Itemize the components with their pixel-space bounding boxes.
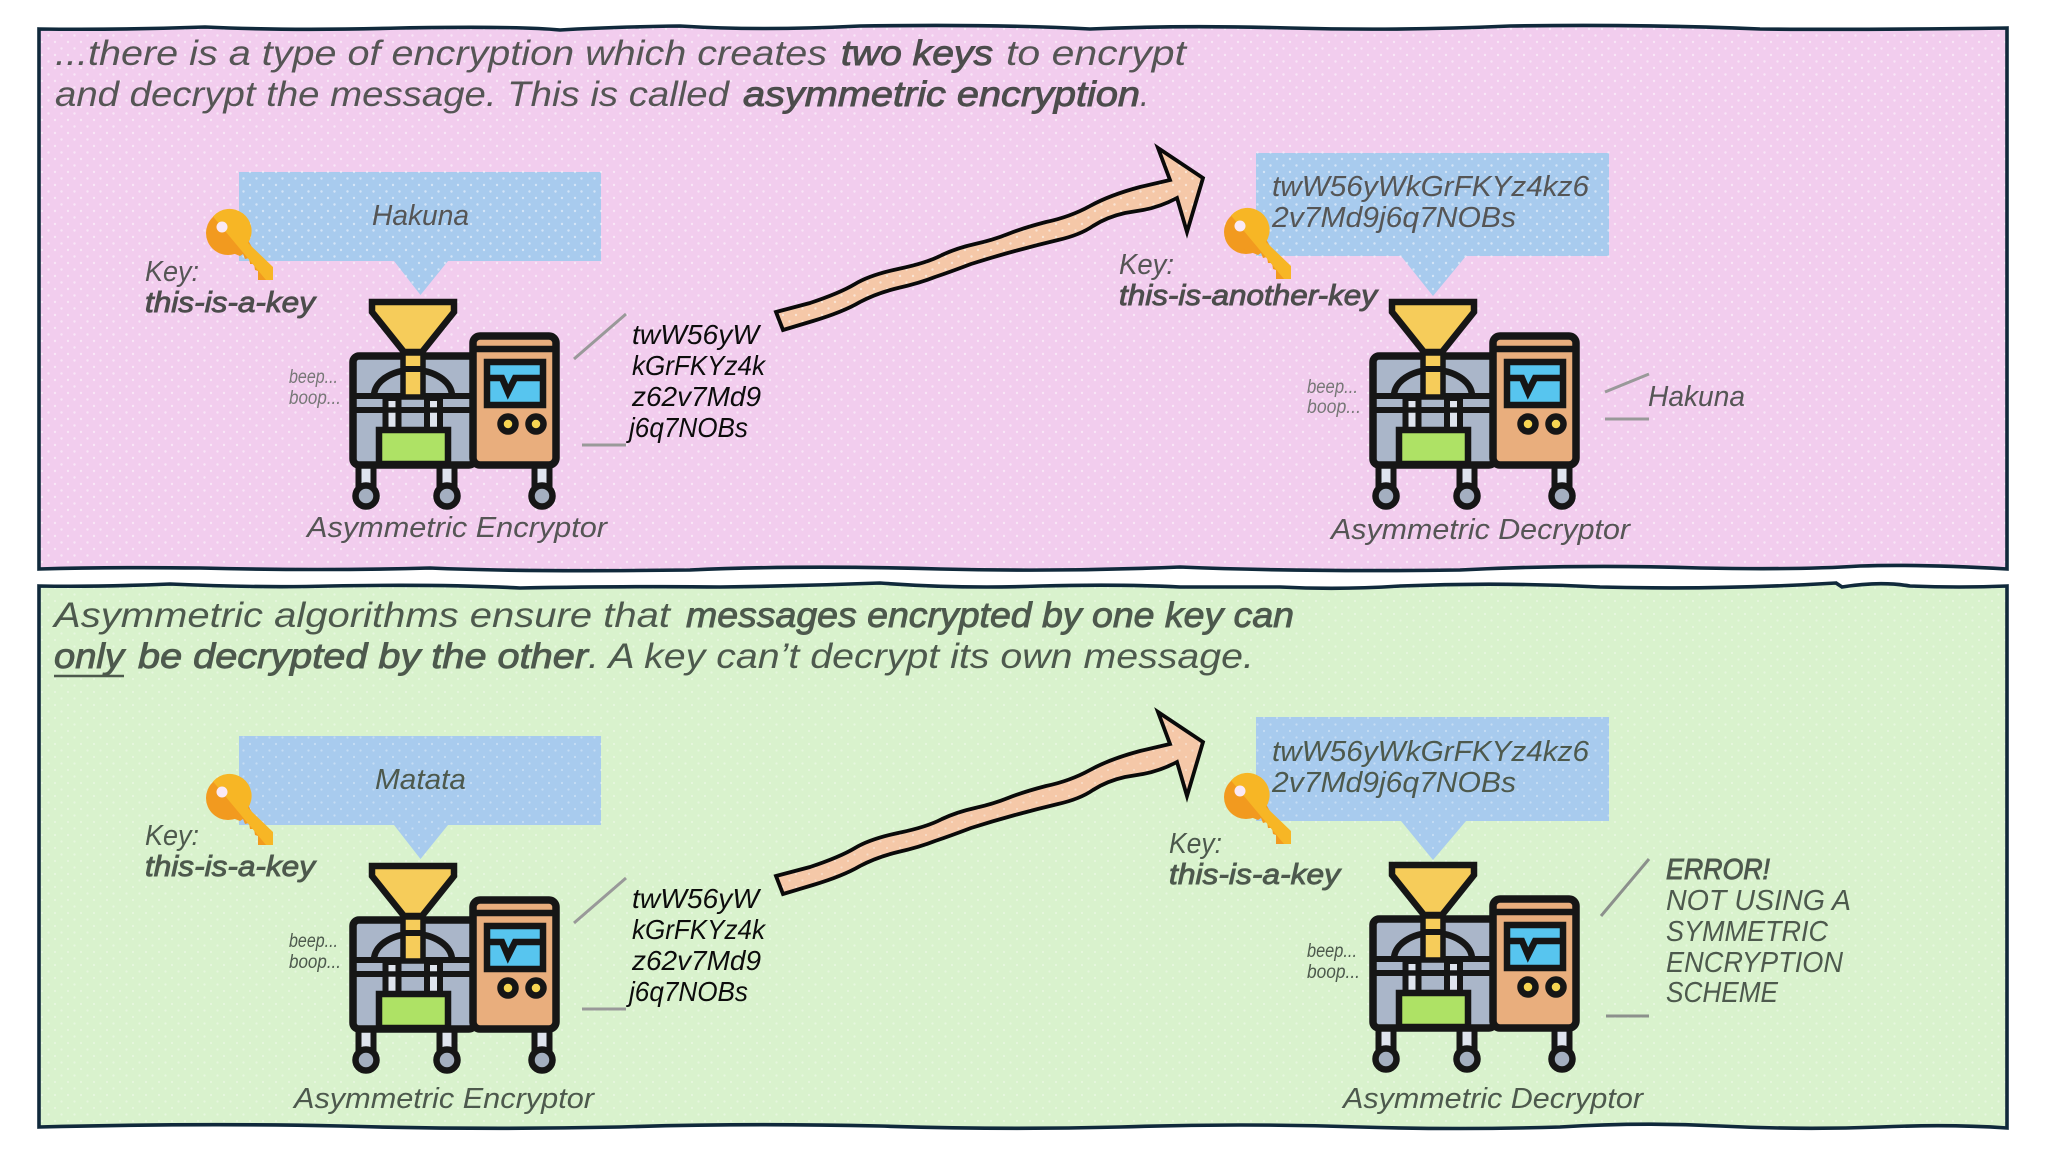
icon: encryptor machine [353,302,556,506]
icon: decryptor machine [1373,865,1576,1070]
key label: this-is-a-key [1169,859,1342,891]
beep boop label: beep... [1307,377,1358,398]
ciphertext output: z62v7Md9 [631,381,761,412]
key label: another key: Key: [1119,249,1174,281]
arrow: encryptor to decryptor [776,148,1203,330]
speech bubble: ciphertext input [1256,717,1609,860]
ciphertext output: twW56yW [632,319,762,350]
beep boop label: boop... [1307,962,1360,983]
icon: decryptor machine [1373,302,1576,506]
beep boop label: boop... [1307,397,1361,418]
beep boop label [1307,941,1360,983]
output lines [574,314,626,445]
text: input message: Hakuna [372,200,469,232]
error message: ERROR! [1666,854,1770,886]
key label [1169,828,1342,891]
machine label: decryptor: Asymmetric Decryptor [1329,514,1631,546]
error message: NOT USING A [1666,885,1851,917]
beep boop label [289,931,341,973]
heading: two keys: to encrypt [1006,34,1187,73]
key label: this-is-a-key [145,287,317,319]
icon: key (decryptor) [1224,773,1291,844]
beep boop label [1307,377,1361,418]
icon: key (encryptor) [206,774,273,845]
beep boop label [289,367,341,409]
heading: two keys: ...there is a type of encryption which creates [55,34,827,73]
key label: Key: [145,256,199,288]
icon: encryptor machine [353,866,556,1070]
arrow: encryptor to decryptor [776,712,1203,894]
text: ciphertext in bubble: 2v7Md9j6q7NOBs [1271,202,1516,234]
panel: same key cannot decrypt (green) [39,583,2007,1128]
ciphertext output: kGrFKYz4k [632,350,767,381]
icon: key (encryptor) [206,209,273,280]
key label: Key: [145,820,199,852]
ciphertext output [625,883,767,1007]
beep boop label: boop... [289,388,341,409]
speech bubble: Hakuna input [239,172,601,295]
ciphertext output: twW56yW [632,883,762,914]
ciphertext output: j6q7NOBs [625,976,748,1007]
heading: messages encrypted by one key: only [54,637,127,676]
heading: two keys [55,34,1187,114]
key label: Key: [1169,828,1222,860]
text: ciphertext in bubble [1271,171,1590,234]
heading: two keys: . [1140,75,1149,114]
heading: messages encrypted by one key [52,596,1294,676]
beep boop label: beep... [289,931,338,952]
machine label: encryptor: Asymmetric Encryptor [292,1083,595,1115]
machine label: encryptor: Asymmetric Encryptor [305,512,608,544]
heading: messages encrypted by one key: be decrypted by the other [138,637,590,676]
ciphertext output: z62v7Md9 [631,945,761,976]
panel: asymmetric encryption intro (pink) [39,25,2007,571]
heading: messages encrypted by one key: . A key can’t decrypt its own message. [588,637,1254,676]
beep boop label: beep... [1307,941,1357,962]
beep boop label: beep... [289,367,338,388]
text: ciphertext in bubble: 2v7Md9j6q7NOBs [1271,767,1516,799]
error message: ENCRYPTION [1666,947,1843,979]
key label [145,820,317,883]
heading: two keys: two keys [841,34,993,73]
ciphertext output: kGrFKYz4k [632,914,767,945]
error message: SCHEME [1666,977,1779,1009]
output lines [1605,374,1649,419]
icon: key (decryptor) [1224,208,1291,279]
speech bubble: Matata input [239,736,601,859]
key label [145,256,317,319]
ciphertext output [625,319,767,443]
decrypted output: Hakuna [1648,381,1745,413]
heading: two keys: and decrypt the message. This is called [55,75,731,114]
beep boop label: boop... [289,952,341,973]
text: ciphertext in bubble: twW56yWkGrFKYz4kz6 [1272,171,1590,203]
error message: SYMMETRIC [1666,916,1829,948]
output lines [1601,859,1649,1016]
error message [1666,854,1851,1009]
heading: two keys: asymmetric encryption [743,75,1140,114]
speech bubble: ciphertext input [1256,153,1609,296]
ciphertext output: j6q7NOBs [625,412,748,443]
key label: this-is-a-key [145,851,317,883]
text: input message: Matata [375,764,466,796]
key label: another key: this-is-another-key [1119,280,1379,312]
text: ciphertext in bubble [1271,736,1590,799]
key label: another key [1119,249,1379,312]
text: ciphertext in bubble: twW56yWkGrFKYz4kz6 [1272,736,1590,768]
output lines [574,878,626,1009]
heading: messages encrypted by one key: messages encrypted by one key can [686,596,1294,635]
heading: messages encrypted by one key: Asymmetric algorithms ensure that [52,596,671,635]
machine label: decryptor: Asymmetric Decryptor [1341,1083,1644,1115]
